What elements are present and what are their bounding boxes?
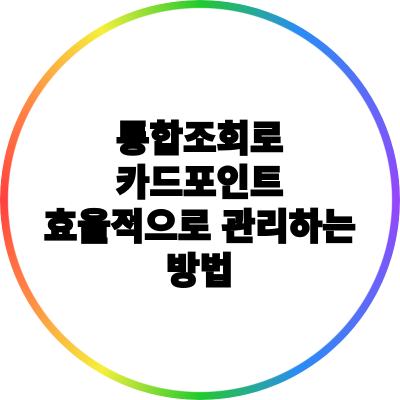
title: 통합조회로 — [116, 118, 284, 159]
title: 카드포인트 — [116, 162, 284, 203]
title — [44, 118, 356, 291]
title: 효율적으로 관리하는 — [44, 206, 356, 247]
title: 방법 — [166, 250, 234, 291]
